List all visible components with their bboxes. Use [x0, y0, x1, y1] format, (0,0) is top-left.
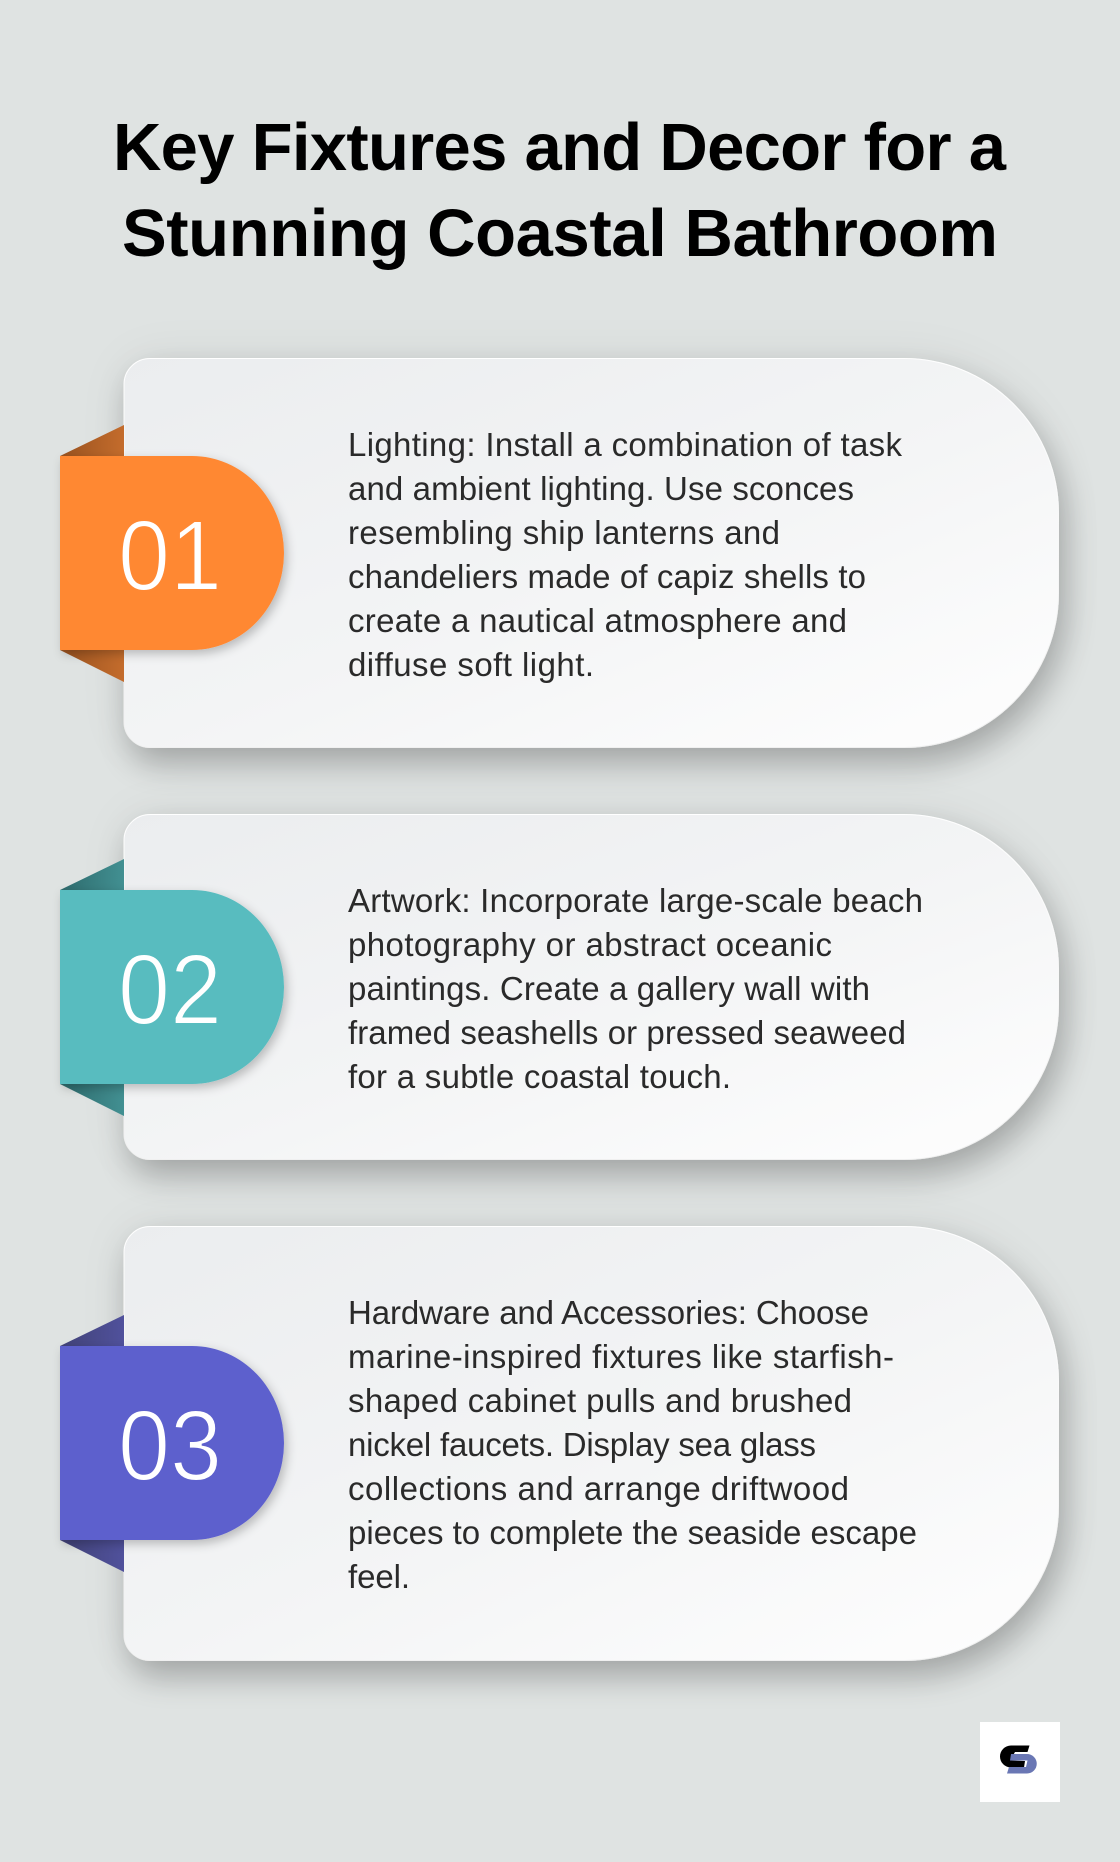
ribbon fold bottom 03: [60, 1540, 124, 1572]
card background 02: [124, 814, 1058, 1160]
text: hardware and accessories: feel.: [348, 1558, 410, 1595]
text: artwork: paintings. Create a gallery wall with: [348, 970, 870, 1007]
panel: step 02 artwork: [60, 814, 1058, 1160]
text: artwork: Artwork: Incorporate large-scale beach: [348, 882, 923, 919]
title: Key Fixtures and Decor for a: [113, 110, 1007, 185]
number 01: 01: [118, 500, 222, 612]
text: lighting: chandeliers made of capiz shells to: [348, 558, 866, 595]
text: hardware and accessories: pieces to complete the seaside escape: [348, 1514, 917, 1551]
number badge 03: [60, 1346, 284, 1540]
text: lighting: and ambient lighting. Use sconces: [348, 470, 854, 507]
text: artwork: framed seashells or pressed seaweed: [348, 1014, 906, 1051]
text: lighting: diffuse soft light.: [348, 646, 594, 683]
text: artwork: for a subtle coastal touch.: [348, 1058, 731, 1095]
title: Stunning Coastal Bathroom: [122, 196, 998, 271]
number 02: 02: [118, 934, 222, 1046]
text: hardware and accessories: shaped cabinet pulls and brushed: [348, 1382, 852, 1419]
text: lighting: resembling ship lanterns and: [348, 514, 780, 551]
ribbon fold top 02: [60, 859, 124, 890]
text: hardware and accessories: [348, 1294, 917, 1595]
ribbon fold top 03: [60, 1315, 124, 1346]
number badge 02: [60, 890, 284, 1084]
text: hardware and accessories: nickel faucets. Display sea glass: [348, 1426, 816, 1463]
card background 01: [124, 358, 1058, 748]
ribbon fold top 01: [60, 425, 124, 456]
text: hardware and accessories: marine-inspired fixtures like starfish-: [348, 1338, 894, 1375]
text: artwork: [348, 882, 923, 1095]
card background 03: [124, 1226, 1058, 1660]
text: lighting: Lighting: Install a combination of task: [348, 426, 902, 463]
panel: step 03 hardware and accessories: [60, 1226, 1058, 1660]
text: artwork: photography or abstract oceanic: [348, 926, 832, 963]
text: hardware and accessories: collections and arrange driftwood: [348, 1470, 849, 1507]
text: hardware and accessories: Hardware and Accessories: Choose: [348, 1294, 869, 1331]
text: lighting: [348, 426, 902, 683]
title: [113, 110, 1007, 271]
ribbon fold bottom 02: [60, 1084, 124, 1116]
logo: [980, 1722, 1060, 1802]
ribbon fold bottom 01: [60, 650, 124, 682]
number 03: 03: [118, 1390, 222, 1502]
number badge 01: [60, 456, 284, 650]
text: lighting: create a nautical atmosphere and: [348, 602, 847, 639]
panel: step 01 lighting: [60, 358, 1058, 748]
